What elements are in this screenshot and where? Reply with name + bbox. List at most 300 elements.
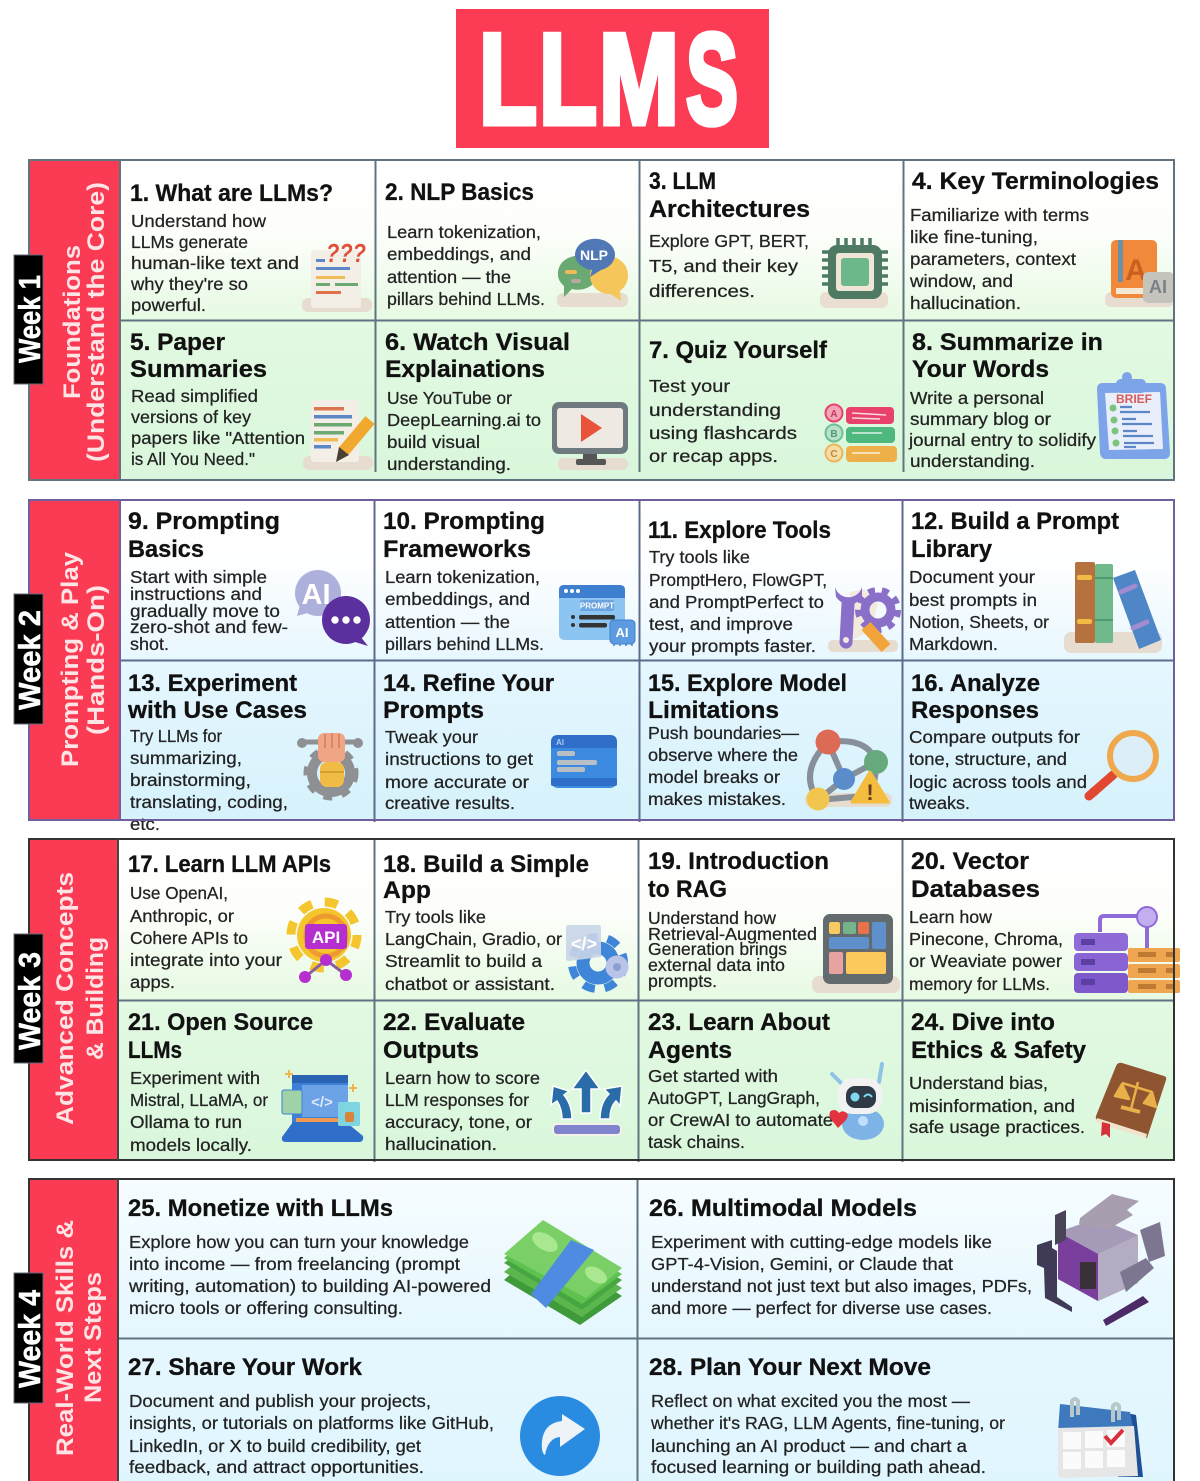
card 6 heading [385,329,570,383]
card 24 text [909,1073,1085,1137]
side label: week 2 theme [57,552,110,767]
card 12 text: best prompts in [909,590,1037,610]
card 15 text: Push boundaries— [648,723,799,743]
side label: week 1 theme [59,182,110,462]
card 20 text: memory for LLMs. [909,974,1050,994]
card 18 heading: 18. Build a Simple [383,851,589,878]
card 22 text: accuracy, tone, or [385,1112,532,1132]
icon: microchip [820,238,888,308]
card 15 text: observe where the [648,745,798,765]
side label: week 4 theme [52,1220,107,1456]
icon: document and pencil [303,400,373,470]
card 13 heading: 13. Experiment [128,670,297,697]
card 19 heading [648,848,829,903]
card 18 text: chatbot or assistant. [385,974,555,994]
card 19 text [648,908,817,991]
card 10 text: embeddings, and [385,589,530,609]
icon: AI chat bubbles [295,570,370,646]
card 2 heading: 2. NLP Basics [385,179,534,206]
card 2 text: embeddings, and [387,244,531,264]
card 16 text: logic across tools and [909,772,1087,792]
card 10 [383,508,635,654]
card 25 text: writing, automation) to building AI-powered [128,1276,491,1296]
card 16 heading [911,670,1040,724]
card 8 text: understanding. [910,451,1035,471]
title: M [599,8,679,152]
card 7 [649,337,897,466]
card 10 text: pillars behind LLMs. [385,634,544,654]
card 11 text: your prompts faster. [649,636,816,656]
card 8 text: Write a personal [910,388,1044,408]
card 13 heading [127,670,307,724]
card 12 heading [911,508,1119,563]
card 5 text [131,386,305,469]
card 9 heading: 9. Prompting [128,508,280,535]
card 7 text: or recap apps. [649,446,778,466]
card 16 text: tweaks. [909,793,970,813]
card 15 heading [648,670,847,724]
week 3 tag: Week 3 [12,952,47,1050]
card 3 text: differences. [649,281,755,301]
card 9 text: instructions and [130,584,262,604]
card 17 text: Anthropic, or [130,906,234,926]
card 28 text: focused learning or building path ahead. [651,1457,986,1477]
icon: tools [828,587,898,652]
icon: prompt window [559,585,635,646]
card 27 text: feedback, and attract opportunities. [129,1457,424,1477]
card 6 [385,329,628,474]
card 12 text: Document your [909,567,1035,587]
card 18 heading: App [383,877,431,904]
card 11 text: and PromptPerfect to [649,592,824,612]
card 17 text: integrate into your [130,950,282,970]
icon: hand with wrench and gear [297,733,363,798]
card 9 [128,508,370,654]
card 7 text: Test your [649,376,730,396]
card 3 [649,168,888,308]
card 20 text [909,907,1063,994]
card 16 text: Compare outputs for [909,727,1080,747]
side label: week 1 theme: Foundations [59,245,86,399]
card 15 text: makes mistakes. [648,789,786,809]
card 6 heading: 6. Watch Visual [385,329,570,356]
card 3 text: Explore GPT, BERT, [649,231,809,251]
card 20 heading: Databases [911,876,1040,903]
card 20 heading: 20. Vector [911,848,1029,875]
card 9 text: Start with simple [130,567,267,587]
card 20 text: or Weaviate power [909,951,1062,971]
card 6 text: understanding. [387,454,511,474]
card 6 text: DeepLearning.ai to [387,410,541,430]
icon: NLP chat bubbles [557,239,628,307]
card 11 heading: 11. Explore Tools [648,517,831,544]
card 8 text: journal entry to solidify [908,430,1096,450]
card 19 text: Retrieval-Augmented [648,924,817,944]
card 12 [909,508,1162,654]
card 18 text [385,907,562,994]
card 3 heading: 3. LLM [649,168,716,195]
icon: prompt window: PROMPT [580,602,614,610]
icon: AI book: AI [1149,277,1167,297]
card 14 heading: 14. Refine Your [383,670,554,697]
card 4 text: like fine-tuning, [910,227,1038,247]
card 12 heading: 12. Build a Prompt [911,508,1119,535]
card 13 heading: with Use Cases [127,697,307,724]
card 21 [128,1009,363,1155]
card 5 heading: 5. Paper [130,329,225,356]
panel: week 1 [12,160,1174,480]
side label: week 1 theme: (Understand the Core) [83,182,110,462]
card 14 text: instructions to get [385,749,533,769]
card 14 text: creative results. [385,793,515,813]
card 27 text: insights, or tutorials on platforms like GitHub, [129,1413,494,1433]
card 8 text: summary blog or [910,409,1051,429]
card 13 text: summarizing, [130,748,242,768]
card 12 text [909,567,1049,654]
card 22 heading: 22. Evaluate [383,1009,525,1036]
card 19 text: Understand how [648,908,776,928]
card 17 text: apps. [130,972,175,992]
card 13 text: etc. [130,814,160,834]
card 12 text: Notion, Sheets, or [909,612,1049,632]
card 18 text: Streamlit to build a [385,951,542,971]
icon: API gear: API [312,928,340,947]
card 25 heading: 25. Monetize with LLMs [128,1195,393,1222]
icon: multiple choice options: A [830,409,838,420]
card 13 text: brainstorming, [130,770,251,790]
card 16 [909,670,1156,813]
card 28 text: launching an AI product — and chart a [651,1436,967,1456]
card 4 text: Familiarize with terms [910,205,1089,225]
icon: AI book [1105,240,1174,307]
icon: databases and cloud [1074,907,1180,993]
card 14 text [385,727,533,813]
card 5 heading [130,329,267,383]
card 17 text: Use OpenAI, [130,883,228,903]
icon: books [1064,562,1162,653]
card 12 text: Markdown. [909,634,998,654]
card 24 heading [911,1009,1086,1064]
icon: AI chat bubbles: AI [302,579,330,611]
card 25 text: micro tools or offering consulting. [129,1298,403,1318]
card 17 heading: 17. Learn LLM APIs [128,851,331,878]
icon: gears and code panel [566,925,627,989]
card 20 heading [911,848,1040,903]
card 14 text: Tweak your [385,727,478,747]
card 9 text: gradually move to [130,601,280,621]
card 24 heading: 24. Dive into [911,1009,1055,1036]
card 4 text [909,205,1089,313]
icon: laptop with code [282,1070,363,1142]
card 13 text: translating, coding, [130,792,288,812]
side label: week 4 theme: Real-World Skills & [52,1220,79,1456]
panel: week 2 [12,500,1174,834]
card 18 heading [383,851,589,904]
card 9 text: zero-shot and few- [130,617,288,637]
card 8 heading [912,329,1103,383]
card 22 text [385,1068,540,1154]
card 26 text: and more — perfect for diverse use cases. [651,1298,992,1318]
week 2 tag: Week 2 [12,610,47,710]
icon: fragmented cube [1037,1194,1165,1326]
card 19 text: external data into [648,955,785,975]
card 19 heading: to RAG [648,876,727,903]
panel: week 3 [12,839,1180,1162]
icon: share arrow [520,1396,600,1476]
card 15 heading: Limitations [648,697,779,724]
icon: multiple choice options: C [830,449,838,460]
card 6 text: Use YouTube or [387,388,512,408]
card 23 text: or CrewAI to automate [648,1110,833,1130]
card 1 text: Understand how [131,211,266,231]
icon: AI book: A [1125,254,1147,287]
icon: AI prompt panel: AI [556,738,564,747]
card 14 [383,670,617,813]
card 2 text: pillars behind LLMs. [387,289,545,309]
icon: multiple choice options: B [830,429,838,440]
card 27 [128,1354,600,1477]
card 21 text: Mistral, LLaMA, or [130,1090,268,1110]
side label: week 3 theme: Advanced Concepts [52,872,79,1125]
card 4 text: parameters, context [910,249,1076,269]
card 16 heading: 16. Analyze [911,670,1040,697]
card 23 [648,1009,884,1152]
card 26 [649,1194,1165,1326]
card 7 text [649,376,797,466]
card 21 heading [128,1009,313,1064]
card 1 [130,180,372,315]
card 25 text: into income — from freelancing (prompt [129,1254,460,1274]
icon: NLP chat bubbles: NLP [580,247,608,263]
card 8 [908,329,1170,471]
card 2 text: Learn tokenization, [387,222,541,242]
icon: document with question marks: ??? [326,238,366,268]
card 13 text [130,726,288,834]
card 25 text: Explore how you can turn your knowledge [129,1232,469,1252]
card 3 text [649,231,809,301]
card 8 heading: 8. Summarize in [912,329,1103,356]
icon: network with warning: ! [866,780,874,805]
side label: week 3 theme [52,872,109,1125]
card 24 text: safe usage practices. [909,1117,1085,1137]
card 11 text [649,547,827,656]
card 13 text: Try LLMs for [130,726,222,746]
card 5 text: is All You Need." [131,449,255,469]
icon: robot with heart [830,1064,884,1140]
icon: brief clipboard: BRIEF [1116,392,1152,406]
icon: calendar [1058,1399,1143,1478]
card 25 [12,1179,1174,1481]
card 28 text: whether it's RAG, LLM Agents, fine-tuning, or [650,1413,1005,1433]
card 24 text: Understand bias, [909,1073,1048,1093]
icon: stack of money [504,1220,622,1325]
icon: dashboard [812,914,900,993]
card 26 text: GPT-4-Vision, Gemini, or Claude that [651,1254,953,1274]
card 18 [383,851,627,994]
card 1 text: LLMs generate [131,232,248,252]
card 10 text [385,567,544,654]
card 1 text [130,211,299,315]
card 25 text [128,1232,491,1318]
card 9 heading: Basics [128,536,204,563]
card 20 text: Pinecone, Chroma, [909,929,1063,949]
card 15 heading: 15. Explore Model [648,670,847,697]
card 26 text [651,1232,1032,1318]
card 17 text: Cohere APIs to [130,928,248,948]
card 15 text [648,723,799,809]
card 27 text: Document and publish your projects, [129,1391,431,1411]
card 18 text: Try tools like [385,907,486,927]
card 19 [648,848,900,993]
card 16 text: tone, structure, and [909,749,1067,769]
side label: week 4 theme: Next Steps [80,1272,107,1403]
side label: week 2 theme: Prompting & Play [57,552,84,767]
card 28 text: Reflect on what excited you the most — [651,1391,971,1411]
card 4 text: window, and [909,271,1013,291]
card 4 heading: 4. Key Terminologies [912,168,1159,195]
card 6 text [387,388,541,474]
card 1 text: why they're so [130,274,248,294]
card 6 text: build visual [387,432,480,452]
card 21 text [130,1068,268,1155]
icon: network with warning [805,730,892,810]
card 26 text: Experiment with cutting-edge models like [651,1232,992,1252]
card 7 heading: 7. Quiz Yourself [649,337,828,364]
card 13 [127,670,363,834]
card 17 text [130,883,282,992]
icon: document with question marks [302,238,372,312]
card 21 text: Ollama to run [130,1112,242,1132]
card 22 text: LLM responses for [385,1090,529,1110]
icon: law book [1096,1063,1166,1138]
card 11 text: Try tools like [649,547,750,567]
card 11 text: PromptHero, FlowGPT, [649,570,827,590]
card 27 text: LinkedIn, or X to build credibility, get [129,1436,421,1456]
card 14 text: more accurate or [385,772,529,792]
card 27 text [129,1391,494,1477]
card 10 text: Learn tokenization, [385,567,540,587]
week 1 tag: Week 1 [12,275,47,363]
card 15 [648,670,892,810]
card 8 text [908,388,1096,471]
card 19 text: Generation brings [648,939,787,959]
card 15 text: model breaks or [648,767,780,787]
card 4 [909,168,1174,313]
card 27 heading: 27. Share Your Work [128,1354,362,1381]
card 23 text: task chains. [648,1132,745,1152]
title [456,8,769,152]
icon: gears and code panel: </> [571,934,597,954]
icon: prompt window: AI [616,625,628,640]
card 5 text: versions of key [131,407,251,427]
card 28 [649,1354,1143,1478]
card 23 text [648,1066,833,1152]
card 22 text: hallucination. [385,1134,497,1154]
card 1 heading: 1. What are LLMs? [130,180,333,207]
card 2 [385,179,628,309]
icon: laptop with code: </> [311,1094,333,1111]
card 21 text: models locally. [130,1135,252,1155]
card 1 text: powerful. [131,295,206,315]
card 24 heading: Ethics & Safety [911,1037,1086,1064]
card 8 heading: Your Words [912,356,1049,383]
card 22 heading [383,1009,525,1064]
card 22 heading: Outputs [383,1037,479,1064]
card 14 heading: Prompts [383,697,484,724]
card 19 heading: 19. Introduction [648,848,829,875]
card 9 heading [128,508,280,563]
card 1 text: human-like text and [131,253,299,273]
card 21 heading: 21. Open Source [128,1009,313,1036]
card 5 [130,329,373,470]
card 22 [383,1009,622,1154]
card 9 text: shot. [130,634,169,654]
card 10 heading: Frameworks [383,536,531,563]
card 14 heading [383,670,554,724]
card 7 text: understanding [649,400,781,420]
card 17 [128,851,357,992]
card 4 text: hallucination. [910,293,1021,313]
card 3 heading: Architectures [649,196,810,223]
card 26 heading: 26. Multimodal Models [649,1195,917,1222]
icon: video monitor [552,402,628,470]
card 20 text: Learn how [909,907,992,927]
title: S [686,8,738,152]
card 19 text: prompts. [648,971,717,991]
card 24 [909,1009,1166,1138]
panel: week 4 [12,1179,1174,1481]
card 16 text [909,727,1087,813]
card 21 heading: LLMs [128,1037,182,1064]
card 10 heading: 10. Prompting [383,508,545,535]
card 12 heading: Library [911,536,992,563]
card 18 text: LangChain, Gradio, or [385,929,562,949]
card 23 text: AutoGPT, LangGraph, [648,1088,820,1108]
card 2 text: attention — the [387,267,511,287]
card 5 text: Read simplified [131,386,258,406]
side label: week 3 theme: & Building [82,937,109,1060]
card 20 [909,848,1180,994]
card 10 text: attention — the [385,612,510,632]
card 28 text [650,1391,1005,1477]
card 3 text: T5, and their key [649,256,798,276]
title: L [539,8,597,152]
week 4 tag: Week 4 [12,1289,47,1388]
icon: brief clipboard [1097,372,1170,459]
card 23 heading [648,1009,830,1064]
icon: multiple choice options [826,404,897,462]
card 6 heading: Explainations [385,356,545,383]
card 23 heading: Agents [648,1037,732,1064]
card 11 text: test, and improve [649,614,793,634]
title: L [479,8,537,152]
card 22 text: Learn how to score [385,1068,540,1088]
icon: three arrows [551,1070,622,1135]
card 23 text: Get started with [648,1066,778,1086]
card 21 text: Experiment with [130,1068,260,1088]
card 16 heading: Responses [911,697,1039,724]
card 28 heading: 28. Plan Your Next Move [649,1354,931,1381]
card 24 text: misinformation, and [909,1096,1075,1116]
side label: week 2 theme: (Hands-On) [83,585,110,735]
card 2 text [387,222,545,309]
card 26 text: understand not just text but also images, PDFs, [651,1276,1032,1296]
icon: magnifying glass [1089,733,1156,796]
card 10 heading [383,508,545,563]
icon: API gear [291,902,357,983]
card 9 text [130,567,288,654]
card 5 text: papers like "Attention [131,428,305,448]
